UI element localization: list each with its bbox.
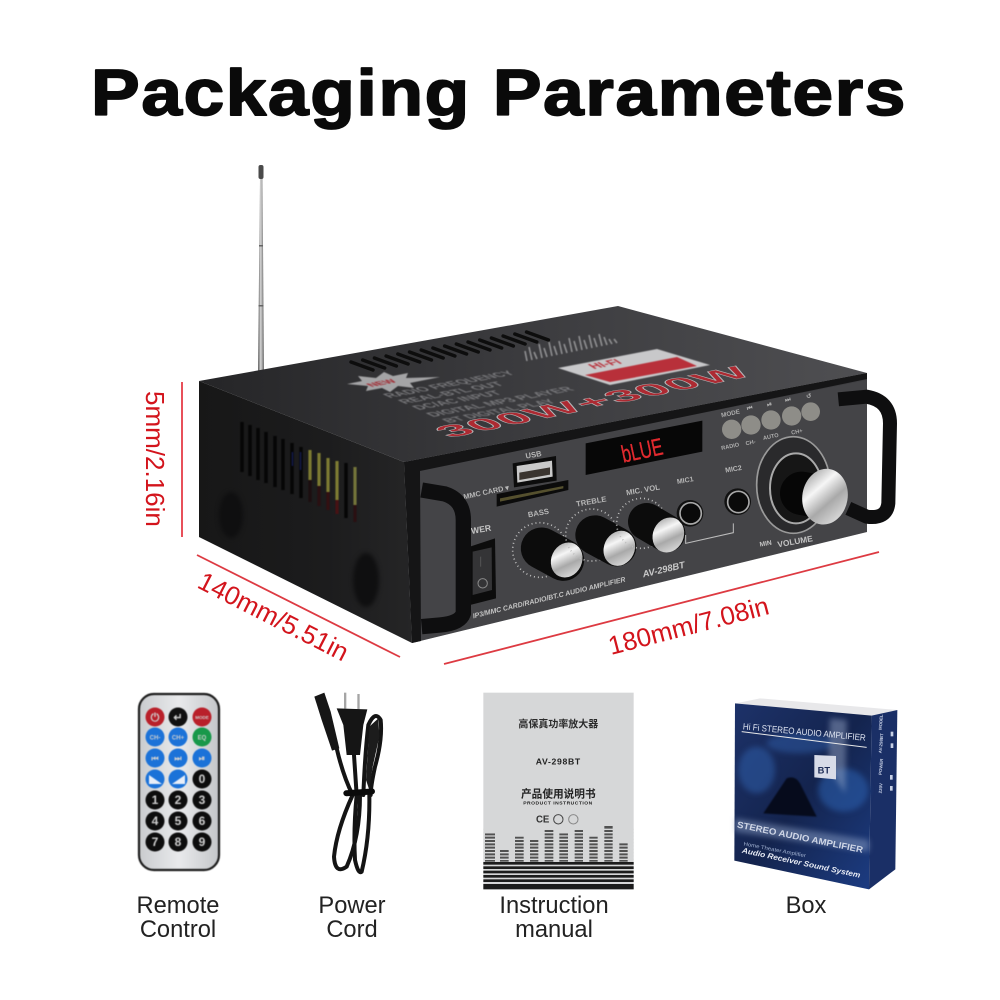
top label: feature list: RADIO FREQUENCY [380, 369, 519, 399]
mic 2 jack [724, 465, 751, 515]
volume labels: VOLUME [777, 533, 814, 549]
dimension: width: 180mm/7.08in [605, 591, 772, 661]
remote button labels: CH+ [172, 736, 185, 742]
top badge: red hi-fi label [558, 349, 710, 385]
box side specs: MODEL [878, 714, 884, 730]
button labels [721, 393, 812, 452]
remote button labels: CH- [150, 736, 160, 742]
box front [734, 703, 872, 889]
box bluetooth badge [814, 755, 836, 779]
remote number pad [146, 770, 212, 852]
label: instruction manual: Instruction [499, 893, 609, 919]
label: instruction manual: manual [515, 917, 593, 943]
remote button labels: 5 [175, 814, 182, 828]
box heading underline [742, 732, 867, 747]
side vents lit by yellow level meter [310, 450, 355, 522]
side vents [242, 422, 346, 518]
top starburst badge: NEW [364, 378, 401, 388]
remote button labels: 8 [175, 835, 182, 849]
manual equalizer gaps [483, 829, 634, 859]
button labels: CH- [745, 439, 756, 447]
top badge: red hi-fi label: HI-FI [584, 357, 625, 371]
manual certification marks: CE [536, 815, 550, 826]
usb port: USB [525, 449, 543, 461]
manual product instruction: PRODUCT INSTRUCTION [523, 801, 593, 807]
volume labels: MIN [759, 540, 773, 549]
dimension: width [444, 552, 879, 664]
remote button labels: 3 [199, 793, 206, 807]
box side specs: AV-298BT [878, 733, 884, 753]
dimension: height: 5mm/2.16in [140, 391, 170, 527]
manual subtitle: 产品使用说明书 [521, 787, 596, 800]
icon: power cord [314, 693, 381, 872]
button labels: ↺ [806, 393, 812, 401]
label: power cord: Cord [326, 917, 378, 943]
remote button labels: EQ [198, 736, 207, 742]
top vents [351, 332, 548, 370]
power switch: WER [470, 522, 493, 536]
appliance connector [314, 693, 339, 751]
top label: feature list: DC/AC INPUT [409, 389, 506, 411]
front corner bevel [404, 373, 867, 643]
remote button labels: ⏮ [151, 754, 159, 763]
dimension: depth: 140mm/5.51in [193, 566, 354, 667]
bass knob [513, 507, 588, 583]
box artwork [735, 718, 869, 852]
remote button labels: 2 [175, 793, 182, 807]
box side specs: POWER [878, 757, 884, 775]
box figure silhouette [763, 777, 817, 817]
top label: feature list: BT DIGITAL PLAY [439, 398, 560, 424]
front panel controls [422, 393, 890, 627]
button labels: ⏮ [746, 405, 754, 413]
antenna [258, 165, 264, 372]
label: power cord: Power [318, 893, 386, 919]
manual certification marks [536, 815, 578, 826]
front caption: IP3/MMC CARD/RADIO/BT.C AUDIO AMPLIFIER [472, 577, 626, 620]
box subtitle: Audio Receiver Sound System [740, 846, 861, 880]
top label: feature list: DIGITAL MP3 PLAYER [423, 385, 578, 418]
box top flap [736, 698, 897, 716]
remote button labels: 9 [199, 835, 206, 849]
top label: power rating: 300W+300W [426, 363, 762, 441]
manual model: AV-298BT [536, 757, 581, 767]
right handle [838, 397, 890, 517]
display window [586, 421, 702, 475]
plug [337, 693, 367, 755]
button labels: RADIO [721, 442, 740, 452]
remote button labels: ⏻ [151, 711, 160, 724]
box side [869, 710, 897, 889]
button labels: CH+ [791, 428, 804, 437]
box side specs: 220V [878, 783, 884, 793]
label: box: Box [786, 893, 827, 919]
cable tie [343, 788, 375, 796]
box heading: Hi Fi STEREO AUDIO AMPLIFIER [742, 721, 867, 743]
memory card slot [463, 480, 568, 507]
remote button labels: 0 [199, 772, 206, 786]
volume labels [759, 533, 814, 549]
remote colour buttons [146, 708, 212, 788]
remote button labels: 7 [152, 835, 159, 849]
remote button labels: ↵ [173, 712, 183, 724]
amplifier front panel [404, 373, 867, 643]
icon: retail box [734, 698, 897, 889]
loop inner fill [366, 718, 379, 790]
button labels: ⏭ [784, 396, 792, 404]
side vents lit by blue glow [292, 452, 301, 470]
top logo: equalizer bars [525, 334, 617, 361]
label: remote control: Control [140, 917, 216, 943]
icon: remote control [139, 694, 219, 870]
front panel texture [420, 380, 867, 641]
side rubber feet [219, 492, 379, 607]
cord loops [334, 716, 381, 872]
display window: bLUE [619, 433, 665, 469]
label: remote control: Remote [137, 893, 219, 919]
mic 2 jack: MIC2 [725, 465, 743, 475]
mic volume knob [617, 482, 690, 558]
memory card slot: MMC CARD ▾ [463, 483, 510, 501]
treble knob [566, 494, 641, 571]
usb port [513, 449, 557, 487]
remote button labels: 1 [152, 793, 159, 807]
top label: feature list [380, 369, 578, 424]
remote button labels: ⏯ [199, 754, 205, 763]
button labels: MODE [721, 408, 741, 419]
remote button labels [150, 711, 209, 849]
icon: instruction manual [483, 693, 634, 889]
manual equalizer bars [485, 826, 628, 862]
amplifier top face [199, 306, 867, 462]
remote button labels: ⏭ [174, 754, 182, 763]
left handle [422, 490, 463, 627]
bass knob: BASS [527, 507, 550, 519]
remote button labels: 4 [152, 814, 159, 828]
mode buttons [722, 402, 820, 439]
treble knob: TREBLE [575, 494, 607, 509]
button labels: AUTO [762, 433, 780, 442]
box tagline: Home Theater Amplifier [743, 841, 807, 859]
box side specs [878, 714, 893, 793]
box product line: STEREO AUDIO AMPLIFIER [736, 819, 865, 855]
button labels: ⏯ [766, 401, 773, 409]
title: Packaging Parameters [91, 56, 907, 129]
top starburst badge [347, 372, 440, 392]
amplifier left side face [199, 381, 412, 643]
remote button labels: 6 [199, 814, 206, 828]
icon: amplifier with antenna [199, 165, 890, 643]
mic 1 jack: MIC1 [676, 476, 694, 486]
mic input bracket [686, 523, 733, 543]
mic volume knob: MIC. VOL [625, 482, 661, 497]
manual heading: 高保真功率放大器 [518, 717, 598, 730]
mic 1 jack [676, 476, 703, 527]
top label: feature list: REAL-BTL OUT [395, 380, 508, 405]
box bluetooth badge: BT [818, 765, 830, 775]
model name: AV-298BT [641, 560, 687, 580]
manual bottom stripes [483, 862, 634, 889]
power switch [470, 522, 496, 605]
remote button labels: MODE [195, 715, 209, 720]
volume knob [757, 437, 852, 533]
